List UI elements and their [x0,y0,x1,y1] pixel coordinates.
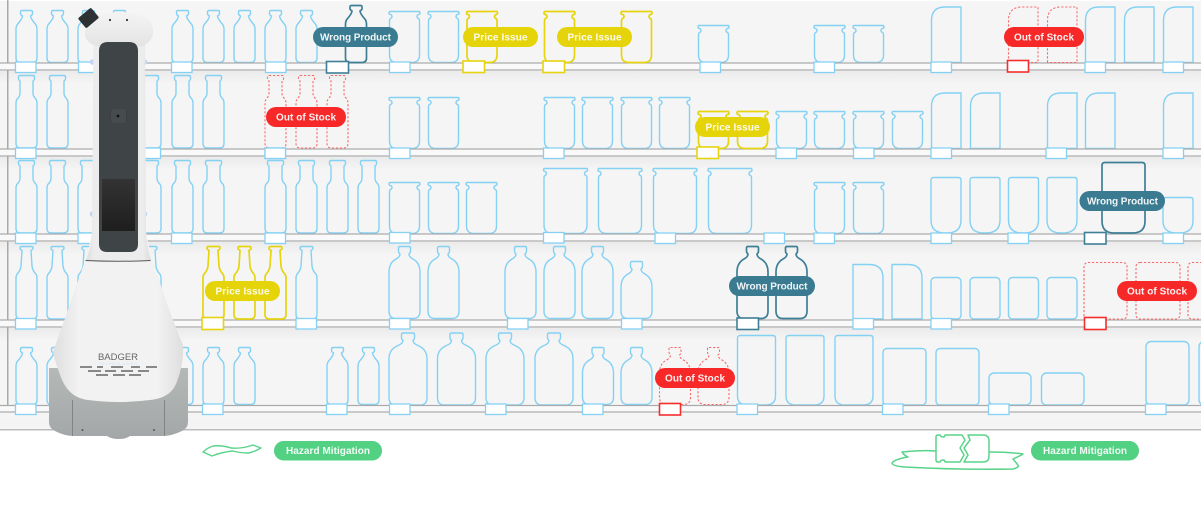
shelf row 4 [0,246,1201,330]
robot camera module [110,108,126,124]
row 2 products [16,76,1193,148]
out of stock flag, row 2 [265,76,348,158]
out of stock flag, row 1: Out of Stock [1014,32,1074,44]
shelf row 1 [0,6,1201,73]
icon: broken jar [936,435,989,462]
row 3 products [16,160,1193,234]
price issue flag, first jar [463,12,538,72]
row 5 products [16,333,1201,405]
robot collar seam [86,260,150,262]
out of stock flag, row 2: Out of Stock [276,112,336,124]
out of stock flag, row 5 [655,348,735,415]
price issue flag, second pair of jars: Price Issue [568,32,622,44]
robot screen [102,179,135,231]
wrong product flag, row 1: Wrong Product [320,32,392,44]
hazard: floor streak [203,441,382,460]
robot bell body [53,232,183,402]
shelf row 2 [0,76,1201,158]
price issue flag, row 4: Price Issue [216,286,270,298]
robot grey base [49,368,188,439]
robot camera on head [78,8,99,28]
row 2 shelf labels [16,148,1184,158]
robot head cap [85,12,153,46]
robot base seams [72,400,164,436]
out of stock flag, row 1 [1004,7,1084,72]
wrong product flag, row 3: Wrong Product [1087,196,1159,208]
out of stock flag, row 5: Out of Stock [665,374,725,384]
robot column [86,40,151,260]
hazard: floor streak: Hazard Mitigation [286,446,370,457]
hazard: broken jar and spill [892,435,1139,469]
robot brand text: TECHNOLOGIES [99,361,137,366]
shelf row 3 [0,160,1201,244]
shelf row 5 [0,333,1201,415]
price issue flag, row 2 [695,112,770,158]
price issue flag, second pair of jars [543,12,652,72]
wrong product flag, row 4: Wrong Product [736,282,808,292]
icon: spill puddle [892,451,1023,469]
row 4 shelf labels [16,318,952,329]
wrong product flag, row 3 [1080,162,1165,244]
robot dark column [99,42,138,252]
robot head dots [109,19,128,21]
price issue flag, first jar: Price Issue [474,32,528,44]
wrong product flag, row 1 [313,6,398,73]
out of stock flag, row 4 [1084,262,1201,330]
hazard: broken jar and spill: Hazard Mitigation [1043,446,1127,457]
out of stock flag, row 4: Out of Stock [1127,286,1187,298]
icon: liquid streak [203,445,261,456]
row 3 shelf labels [16,232,1184,244]
price issue flag, row 4 [202,246,286,330]
robot sensor glow [90,59,147,217]
robot vents [80,367,157,375]
row 1 shelf labels [16,62,1184,72]
price issue flag, row 2: Price Issue [706,122,760,134]
row 1 products [16,7,1193,62]
row 5 shelf labels [16,404,1166,414]
robot: Badger [49,8,188,439]
row 4 products [16,246,1077,319]
robot brand text: BADGER [98,352,138,363]
wrong product flag, row 4 [729,246,815,330]
